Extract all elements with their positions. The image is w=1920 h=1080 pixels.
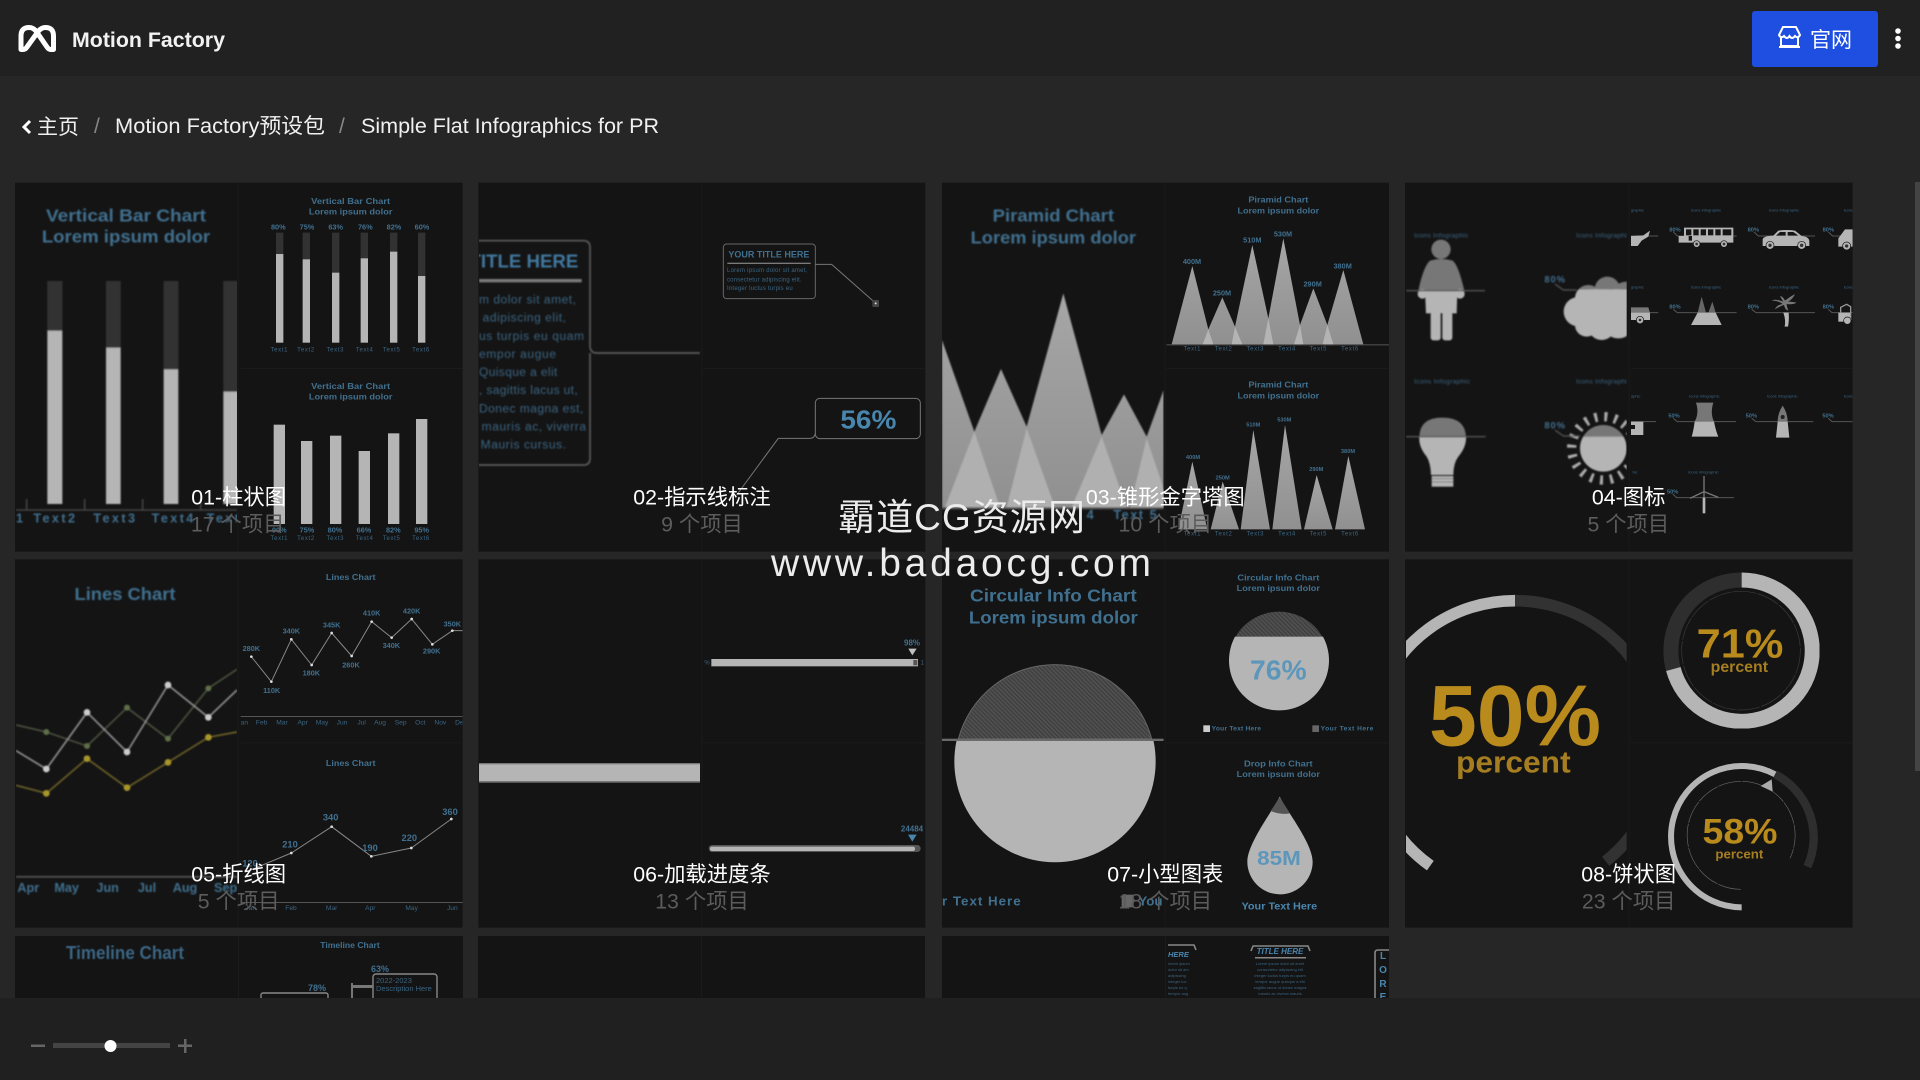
icon: wind turbine — [1690, 476, 1718, 513]
bottom-right: six-month line chart — [241, 758, 463, 912]
top-right: monthly line chart: May — [316, 719, 329, 726]
card 10: blank preview — [478, 936, 925, 998]
card 02 caption: 02-指示线标注 — [633, 486, 771, 510]
left pane: large text callout: Donec magna est, — [479, 401, 583, 415]
bottom-right: plain bar chart: 95% — [414, 526, 429, 535]
top-right: 76% circle: Your Text Here — [1212, 726, 1261, 733]
left pane: large pyramids: 4 — [1087, 508, 1094, 522]
top-right: monthly line chart: Sep — [395, 719, 407, 726]
left pane: large text callout: empor augue — [479, 347, 556, 361]
top-right: monthly line chart: Feb — [256, 719, 268, 726]
card 02 caption: 9 个项目 — [661, 513, 743, 537]
bottom-right: separate pyramids: Text3 — [1247, 531, 1264, 537]
bottom-right: drop chart: Drop Info Chart — [1244, 758, 1313, 768]
top-right: bar chart with tracks: Text1 — [271, 348, 288, 354]
top-right: monthly line chart: an — [241, 719, 248, 726]
card 06 caption — [633, 862, 771, 913]
left pane: large bar chart: Lorem ipsum dolor — [42, 227, 210, 247]
left pane: large icons — [1406, 233, 1643, 487]
bottom-right: six-month line chart: 190 — [362, 843, 378, 853]
left pane: large text callout: m dolor sit amet, — [479, 292, 576, 306]
bottom-right: separate pyramids: 400M — [1186, 455, 1200, 461]
left pane: large bar chart: Text4 — [152, 512, 193, 526]
bottom-right: plain bar chart: 82% — [386, 526, 401, 535]
top-right: overlapping pyramids: 380M — [1333, 262, 1352, 271]
bottom-right: separate pyramids: 290M — [1309, 467, 1324, 473]
right panes: small icons: 80% — [1823, 305, 1834, 311]
top-right: monthly line chart: 350K — [444, 620, 462, 629]
icon: palm tree — [1772, 294, 1797, 327]
top-right: monthly line chart: De — [455, 719, 464, 726]
top-right: bar chart with tracks: 80% — [271, 222, 286, 231]
watermark: 霸道CG资源网 — [838, 497, 1085, 538]
top-right: 76% circle: 76% — [1250, 654, 1307, 685]
top-right: 76% circle: Your Text Here — [1321, 726, 1374, 733]
top-right: bar chart with tracks: Lorem ipsum dolor — [309, 207, 393, 217]
top-right: bar chart with tracks: 63% — [328, 222, 343, 231]
bottom-right: drop chart: 85M — [1257, 848, 1301, 870]
top-right: 76% circle — [1203, 572, 1374, 733]
icon: plane — [1631, 231, 1650, 246]
watermark — [770, 497, 1151, 585]
icon: forklift — [1838, 304, 1851, 324]
left pane: large text callout: Mauris cursus. — [481, 438, 566, 452]
top-right: monthly line chart: Aug — [374, 719, 386, 726]
top-right: title callout box: Integer luctus turpis eu — [727, 286, 793, 292]
card 07 caption: 07-小型图表 — [1107, 862, 1223, 886]
top-right: overlapping pyramids: 250M — [1213, 288, 1231, 297]
icon: mountain — [1691, 297, 1722, 325]
card 11: text columns (partly hidden): adipiscing — [1168, 973, 1186, 978]
top-right: bar chart with tracks: Vertical Bar Chart — [311, 196, 390, 206]
top-right: monthly line chart: 345K — [323, 621, 341, 630]
bottom-right: plain bar chart: Text3 — [327, 536, 344, 542]
top-right: title callout box: Lorem ipsum dolor sit amet, — [727, 268, 808, 274]
bottom-right: six-month line chart: Jun — [447, 905, 458, 912]
left pane: large text callout: , sagittis lacus ut, — [479, 383, 578, 397]
bottom-right: drop chart: Lorem ipsum dolor — [1237, 769, 1321, 779]
card 11: text columns (partly hidden): turpis eu q — [1168, 985, 1187, 990]
icon: cloud — [1544, 275, 1643, 340]
right panes: small icons: aphic — [1631, 394, 1640, 399]
icon: car — [1763, 230, 1809, 249]
top-right: 98% progress bar — [704, 638, 925, 667]
left pane: large icons: Icons Infographic — [1576, 233, 1631, 240]
top-right: bar chart with tracks: 76% — [358, 222, 373, 231]
bottom-right: 58% ring: 58% — [1702, 812, 1777, 851]
top-right: bar chart with tracks: 75% — [300, 222, 315, 231]
card 11: text columns (partly hidden): mauris ac viverra mauris — [1258, 991, 1302, 996]
bottom-right: six-month line chart: Apr — [365, 905, 376, 912]
watermark: www.badaocg.com — [770, 542, 1151, 585]
card 03 caption — [1086, 486, 1245, 537]
card 11: text columns (partly hidden): integer luc — [1168, 979, 1186, 984]
card 04: icons — [1405, 183, 1853, 552]
left pane: large text callout — [469, 241, 700, 465]
bottom-right: plain bar chart: Text4 — [356, 536, 373, 542]
right panes: small icons: Icons — [1844, 207, 1853, 212]
bottom-right: six-month line chart: Jan — [245, 905, 256, 912]
top-right: title callout box — [723, 244, 879, 307]
bottom-right: 24484 progress bar — [709, 824, 924, 852]
left pane: three-series line chart: Lines Chart — [74, 584, 176, 604]
bottom-right: separate pyramids: Text1 — [1184, 531, 1201, 537]
right panes: small icons: Icons Infographic — [1769, 207, 1799, 212]
header bar — [0, 0, 1920, 76]
card 04 caption: 5 个项目 — [1587, 513, 1669, 537]
scrollbar thumb — [1915, 182, 1920, 771]
bottom-right: plain bar chart: Text6 — [412, 536, 430, 542]
right panes: small icons: graphic — [1631, 207, 1644, 212]
card 03: pyramid chart — [942, 183, 1389, 552]
bottom-right: separate pyramids: 530M — [1277, 417, 1292, 423]
bottom-right: 58% ring: percent — [1715, 847, 1764, 861]
card 05 caption — [191, 862, 286, 913]
left pane: large circular chart: r Text Here — [942, 893, 1021, 908]
top-right: bar chart with tracks: 60% — [415, 222, 430, 231]
left pane: large icons: Icons Infographic — [1576, 379, 1631, 386]
top-right: bar chart with tracks: 82% — [387, 222, 402, 231]
card 07 caption: 18 个项目 — [1119, 889, 1212, 913]
right panes: small icons — [1631, 207, 1853, 513]
card 03 caption: 10 个项目 — [1119, 513, 1212, 537]
card 09: timeline chart (partly hidden): 2022-2023 — [376, 976, 412, 985]
card 08 caption: 23 个项目 — [1582, 889, 1675, 913]
breadcrumb: / — [94, 115, 100, 138]
top-right: overlapping pyramids: Text5 — [1310, 346, 1327, 352]
breadcrumb — [24, 115, 659, 139]
bottom-right: six-month line chart: 120 — [242, 859, 258, 869]
top-right: overlapping pyramids: Text4 — [1278, 346, 1296, 352]
card 08: pie charts — [1369, 559, 1853, 928]
right panes: small icons: 80% — [1748, 305, 1759, 311]
card 11: text columns (partly hidden): O — [1379, 965, 1387, 976]
left pane: large text callout: mauris ac, viverra — [482, 420, 586, 434]
top-right: 98% progress bar: % — [704, 661, 710, 667]
top-right: monthly line chart: Oct — [415, 719, 426, 726]
icon: van — [1631, 307, 1650, 324]
right panes: small icons: Icons — [1844, 394, 1853, 399]
bottom-right: plain bar chart: Vertical Bar Chart — [311, 381, 390, 391]
top-right: overlapping pyramids: 510M — [1243, 236, 1262, 245]
left pane: three-series line chart: Jun — [96, 881, 119, 895]
bottom-right: six-month line chart: Lines Chart — [326, 758, 376, 768]
bottom-right: separate pyramids: 380M — [1341, 449, 1355, 455]
right panes: small icons: Icons Infographic — [1767, 394, 1798, 399]
bottom-right: plain bar chart: 80% — [328, 526, 343, 535]
card 09: timeline chart (partly hidden): Timeline Chart — [66, 943, 184, 963]
left pane: large bar chart: Text2 — [33, 512, 75, 526]
top-right: monthly line chart: 280K — [243, 644, 261, 653]
bottom-right: six-month line chart: 340 — [323, 813, 338, 823]
breadcrumb: Motion Factory预设包 — [115, 115, 325, 138]
card 11: text columns (partly hidden): HERE — [1168, 950, 1190, 959]
left pane: large progress bar — [479, 763, 700, 783]
left pane: 50% ring: 50% — [1429, 669, 1601, 765]
top-right: monthly line chart — [241, 572, 464, 726]
menu dots — [1895, 28, 1901, 49]
bottom-right: plain bar chart: Text5 — [383, 536, 400, 542]
card 11: text columns (partly hidden): E — [1380, 992, 1387, 1003]
left pane: large bar chart: Text5 — [207, 512, 248, 526]
left pane: three-series line chart — [16, 584, 238, 895]
card 11: text columns (partly hidden): consectetur adipiscing elit — [1257, 967, 1304, 972]
left pane: three-series line chart: Aug — [173, 881, 197, 895]
button: official site — [1752, 11, 1878, 67]
top-right: bar chart with tracks: Text2 — [297, 348, 315, 354]
right panes: small icons: hic — [1632, 469, 1638, 474]
top-right: overlapping pyramids: Text3 — [1247, 346, 1264, 352]
left pane: large pyramids: Lorem ipsum dolor — [971, 227, 1136, 247]
card 07 caption — [1107, 862, 1223, 913]
top-right: monthly line chart: Jun — [337, 719, 348, 726]
card 08 caption: 08-饼状图 — [1581, 862, 1676, 886]
left pane: 50% ring — [1406, 594, 1627, 870]
card 11: text columns (partly hidden): Lorem ipsum dolor sit amet — [1256, 961, 1305, 966]
icon: person — [1406, 240, 1485, 340]
bottom-right: six-month line chart: May — [405, 905, 419, 912]
card 11: text columns (partly hidden): integer luctus turpis eu quam — [1254, 973, 1306, 978]
icon: sun: 80% — [1544, 421, 1566, 431]
brand name: Motion Factory — [72, 28, 225, 52]
top-right: 71% ring: 71% — [1697, 620, 1783, 666]
card 05 caption: 05-折线图 — [191, 862, 286, 886]
top-right: monthly line chart: 180K — [303, 669, 321, 678]
left pane: large pyramids — [942, 206, 1170, 522]
top-right: monthly line chart: 340K — [383, 641, 401, 650]
left pane: large text callout: Quisque a elit — [479, 365, 558, 379]
left pane: large pyramids: Text 5 — [1113, 508, 1157, 522]
bottom-right: drop chart: Your Text Here — [1241, 901, 1318, 912]
icon: light bulb — [1406, 418, 1486, 487]
card 01 caption: 17 个项目 — [191, 513, 284, 537]
card 05 caption: 5 个项目 — [198, 889, 280, 913]
icon: sun — [1544, 417, 1635, 480]
top-right: monthly line chart: Mar — [276, 719, 289, 726]
top-right: 71% ring: percent — [1711, 659, 1768, 676]
card 06 caption: 13 个项目 — [655, 889, 749, 913]
top-right: 71% ring — [1671, 580, 1812, 721]
left pane: large text callout: TITLE HERE — [469, 250, 578, 271]
left pane: large text callout: us turpis eu quam — [479, 329, 584, 343]
logo mark — [21, 28, 54, 50]
card 11: text columns (partly hidden): tempor aug — [1168, 991, 1188, 996]
top-right: monthly line chart: 420K — [403, 606, 421, 615]
bottom-right: plain bar chart — [271, 381, 430, 542]
right panes: small icons: Icons Infographic — [1769, 284, 1799, 289]
card 09: timeline chart (partly hidden): 78% — [308, 983, 326, 993]
right panes: small icons: 50% — [1667, 489, 1678, 495]
left pane: large text callout: adipiscing elit, — [483, 310, 566, 324]
card 09: timeline chart (partly hidden): 63% — [371, 964, 389, 974]
left pane: large icons: Icons Infographic — [1414, 233, 1469, 240]
left pane: 50% ring: percent — [1456, 746, 1571, 780]
card 11: text columns (partly hidden) — [942, 936, 1389, 1003]
bottom-right: separate pyramids: Text5 — [1310, 531, 1327, 537]
icon: store — [1779, 27, 1800, 47]
footer bar — [0, 998, 1920, 1080]
left pane: three-series line chart: Jul — [138, 881, 156, 895]
top-right: bar chart with tracks: Text4 — [356, 348, 373, 354]
top-right: monthly line chart: 290K — [423, 646, 441, 655]
bottom-right: separate pyramids: 510M — [1246, 423, 1261, 429]
top-right: overlapping pyramids: Text6 — [1341, 346, 1359, 352]
right panes: small icons: 80% — [1823, 227, 1834, 233]
top-right: 76% circle: Circular Info Chart — [1237, 572, 1319, 582]
top-right: 98% progress bar: 1 — [921, 661, 925, 667]
left pane: large icons: Icons Infographic — [1414, 379, 1471, 386]
top-right: monthly line chart: Jul — [357, 719, 366, 726]
left pane: large circular chart: Lorem ipsum dolor — [969, 607, 1138, 627]
card 01 caption — [191, 486, 286, 537]
card 05: line chart — [15, 559, 464, 928]
bottom-right: drop chart — [1237, 758, 1321, 912]
bottom-right: separate pyramids: 250M — [1216, 475, 1230, 481]
right panes: small icons: Icons — [1844, 284, 1853, 289]
top-right: monthly line chart: Apr — [297, 719, 309, 726]
bottom-right: six-month line chart: 360 — [442, 807, 458, 817]
card 09: timeline chart (partly hidden): Timeline Chart — [320, 940, 380, 950]
bottom-right: six-month line chart: 210 — [282, 839, 298, 849]
bottom-right: 58% ring — [1671, 766, 1814, 907]
right panes: small icons: 80% — [1669, 227, 1681, 233]
icon: rocket — [1776, 406, 1789, 438]
card 11: text columns (partly hidden): lorem ipsum — [1168, 961, 1190, 966]
bottom-right: plain bar chart: 90% — [272, 526, 287, 535]
bottom-right: plain bar chart: 66% — [357, 526, 372, 535]
top-right: bar chart with tracks: Text5 — [383, 348, 400, 354]
bottom-right: six-month line chart: Feb — [285, 905, 297, 912]
left pane: large circular chart — [942, 586, 1164, 908]
top-right: monthly line chart: 260K — [342, 660, 360, 669]
top-right: monthly line chart: 410K — [363, 608, 381, 617]
left pane: large pyramids: Piramid Chart — [993, 206, 1114, 226]
card 11: text columns (partly hidden): L — [1380, 951, 1386, 962]
card 06: progress bars — [478, 559, 925, 928]
card 02 caption — [633, 486, 771, 537]
left pane: large circular chart: Circular Info Chart — [970, 586, 1137, 606]
card 08 caption — [1581, 862, 1676, 913]
card 09: timeline chart (partly hidden) — [15, 936, 463, 1013]
bottom-right: 56% callout: 56% — [840, 405, 896, 435]
card 04 caption — [1587, 486, 1669, 537]
card 11: text columns (partly hidden): tempor augue quisque a elit — [1255, 979, 1306, 984]
top-right: monthly line chart: 110K — [263, 686, 281, 695]
left pane: large bar chart: Vertical Bar Chart — [46, 206, 206, 226]
card 03 caption: 03-锥形金字塔图 — [1086, 486, 1245, 510]
card 06 caption: 06-加载进度条 — [633, 862, 771, 886]
right panes: small icons: 50% — [1668, 414, 1680, 420]
card 11: text columns (partly hidden): dolor sit am — [1168, 967, 1189, 972]
card 09: timeline chart (partly hidden): Description Here — [376, 984, 432, 993]
card 11: text columns (partly hidden): TITLE HERE — [1257, 947, 1304, 956]
card 11: text columns (partly hidden): sagittis lacus ut donec magna — [1254, 985, 1307, 990]
top-right: 98% progress bar: 98% — [904, 638, 920, 647]
bottom-right: six-month line chart: 220 — [402, 833, 417, 843]
right panes: small icons: 50% — [1822, 414, 1834, 420]
bottom-right: six-month line chart: Mar — [326, 905, 338, 912]
right panes: small icons: 80% — [1748, 227, 1759, 233]
left pane: large bar chart — [16, 206, 248, 526]
bottom-right: separate pyramids — [1178, 380, 1365, 537]
top-right: overlapping pyramids: 530M — [1274, 230, 1292, 239]
top-right: overlapping pyramids: Lorem ipsum dolor — [1237, 205, 1320, 215]
breadcrumb: Simple Flat Infographics for PR — [361, 115, 659, 138]
breadcrumb: / — [339, 115, 345, 138]
bottom-right: separate pyramids: Text4 — [1278, 531, 1296, 537]
card 11: text columns (partly hidden): R — [1379, 979, 1387, 990]
top-right: overlapping pyramids: 400M — [1183, 257, 1201, 266]
card 07: small charts — [942, 559, 1389, 928]
top-right: bar chart with tracks: Text3 — [327, 348, 344, 354]
bottom-right: separate pyramids: Text6 — [1341, 531, 1359, 537]
bottom-right: separate pyramids: Text2 — [1215, 531, 1232, 537]
top-right: overlapping pyramids: Text1 — [1184, 346, 1201, 352]
top-right: bar chart with tracks — [271, 196, 430, 354]
top-right: title callout box: consectetur adipiscing elit. — [727, 277, 802, 283]
card 01 caption: 01-柱状图 — [191, 486, 286, 510]
breadcrumb: 主页 — [37, 116, 79, 139]
bottom-right: 56% callout — [737, 398, 920, 495]
icon: cooling tower — [1692, 403, 1718, 437]
bottom-right: 24484 progress bar: 24484 — [901, 824, 924, 833]
right panes: small icons: Icons Infographic — [1691, 284, 1721, 289]
bottom-right: plain bar chart: Text2 — [297, 536, 315, 542]
bottom-right: plain bar chart: Lorem ipsum dolor — [309, 392, 393, 402]
icon: factory block — [1631, 422, 1643, 435]
bottom-right: plain bar chart: Text1 — [271, 536, 288, 542]
card 02: callout lines — [469, 183, 925, 552]
top-right: overlapping pyramids: Text2 — [1215, 346, 1232, 352]
top-right: monthly line chart: Nov — [434, 719, 447, 726]
top-right: overlapping pyramids: Piramid Chart — [1248, 195, 1308, 205]
button: official site: 官网 — [1810, 29, 1852, 52]
icon: bus — [1679, 228, 1733, 247]
bottom-right: separate pyramids: Piramid Chart — [1248, 380, 1308, 390]
left pane: large bar chart: Text3 — [93, 512, 135, 526]
right panes: small icons: graphic — [1631, 284, 1644, 289]
left pane: three-series line chart: May — [54, 881, 79, 895]
zoom slider — [31, 1039, 192, 1053]
top-right: monthly line chart: 340K — [283, 627, 301, 636]
top-right: bar chart with tracks: Text6 — [412, 348, 430, 354]
right panes: small icons: Icons Infographic — [1688, 469, 1719, 474]
top-right: monthly line chart: Lines Chart — [326, 572, 376, 582]
top-right: overlapping pyramids: 290M — [1303, 280, 1322, 289]
right panes: small icons: 80% — [1669, 305, 1681, 311]
card 04 caption: 04-图标 — [1592, 486, 1665, 510]
bottom-right: separate pyramids: Lorem ipsum dolor — [1237, 390, 1320, 400]
left pane: large circular chart: You — [1138, 893, 1163, 908]
card 01: bar chart — [15, 183, 463, 552]
icon: cloud: 80% — [1544, 275, 1566, 285]
top-right: 76% circle: Lorem ipsum dolor — [1237, 583, 1321, 593]
icon: truck — [1838, 229, 1853, 250]
top-right: overlapping pyramids — [1167, 195, 1389, 352]
right panes: small icons: Icons Infographic — [1689, 394, 1720, 399]
left pane: three-series line chart: Sep — [214, 881, 238, 895]
top-right: title callout box: YOUR TITLE HERE — [728, 249, 809, 259]
right panes: small icons: 50% — [1746, 414, 1757, 420]
left pane: three-series line chart: Apr — [17, 881, 39, 895]
bottom-right: plain bar chart: 75% — [300, 526, 315, 535]
left pane: large bar chart: 1 — [16, 512, 24, 526]
right panes: small icons: Icons Infographic — [1691, 207, 1721, 212]
